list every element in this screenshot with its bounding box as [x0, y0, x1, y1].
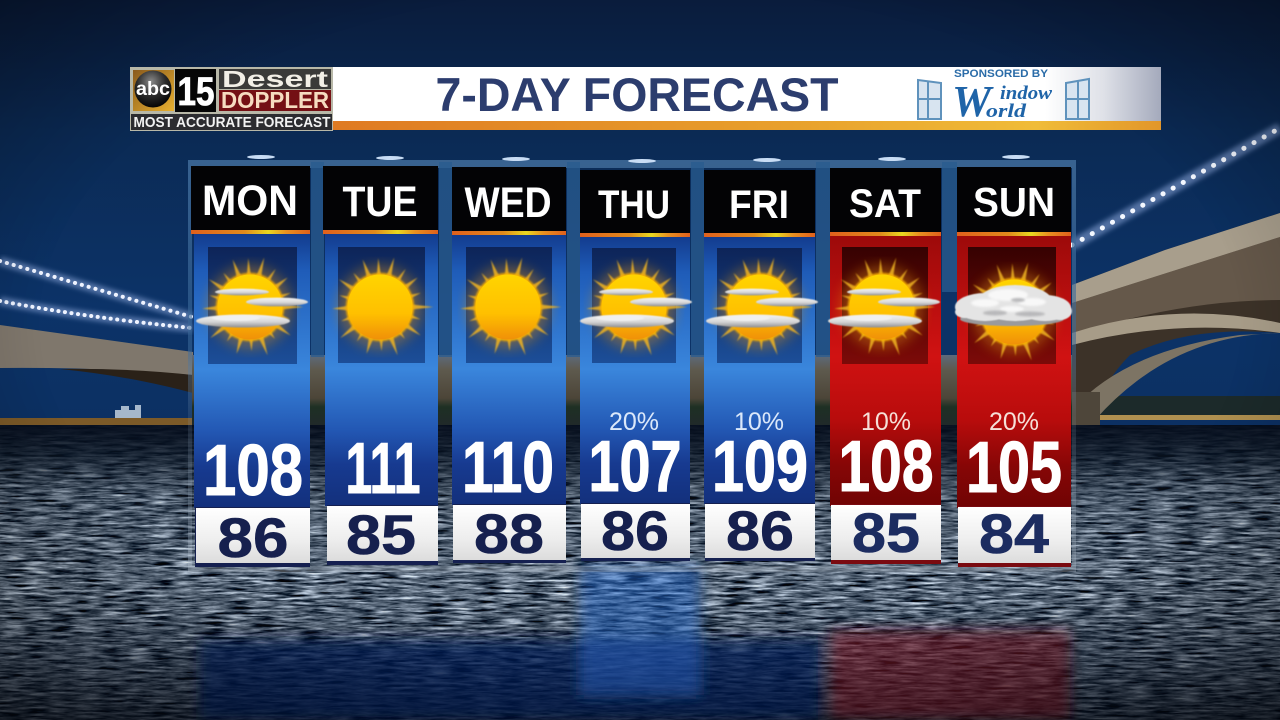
logo: abc15 Desert Doppler: abc [136, 79, 170, 100]
background: left bridge and lights [0, 261, 193, 425]
sponsor: SPONSORED BY [954, 68, 1049, 80]
icon: mostly sunny [580, 257, 692, 357]
panel: Wednesday [452, 167, 566, 565]
high temperature: 108 [838, 427, 934, 507]
panel: Tuesday [323, 166, 438, 566]
day label: TUE [342, 178, 418, 226]
panel: Monday [191, 166, 310, 569]
panel: Saturday [828, 168, 941, 564]
day label: FRI [729, 183, 789, 227]
sponsor: W [952, 77, 994, 126]
chance of rain: 10% [861, 408, 911, 436]
high temperature: 109 [712, 427, 808, 507]
low temperature: 85 [346, 503, 416, 566]
icon: sunny [460, 257, 561, 357]
Doppler: DOPPLER [221, 87, 329, 113]
day label: SUN [973, 179, 1055, 225]
high temperature: 107 [588, 427, 682, 507]
panel: Friday [704, 170, 818, 562]
icon: mostly sunny [196, 257, 308, 357]
sponsor [918, 68, 1089, 126]
icon: mostly sunny [706, 257, 818, 357]
chance of rain: 20% [609, 408, 659, 436]
background: night sky [0, 0, 1280, 440]
icon: mostly sunny [828, 257, 940, 357]
day label: SAT [849, 182, 921, 226]
panel: Thursday [580, 170, 692, 562]
glass frame behind the panels [188, 155, 1076, 572]
low temperature: 86 [218, 506, 288, 569]
high temperature: 111 [346, 429, 420, 509]
day label: THU [598, 183, 670, 227]
title: 7-DAY FORECAST [436, 68, 839, 121]
day label: MON [202, 177, 298, 225]
icon: window right [1066, 79, 1089, 119]
low temperature: 86 [601, 499, 669, 562]
panel: Sunday [955, 167, 1072, 567]
header bar [333, 67, 1161, 130]
sponsor: indow [1000, 83, 1052, 104]
low temperature: 88 [474, 502, 544, 565]
icon: mostly cloudy [955, 262, 1072, 362]
background: right bridge and lights [1072, 128, 1280, 445]
tagline: MOST ACCURATE FORECAST [134, 114, 330, 131]
icon: sunny [332, 257, 433, 357]
channel number: 15 [178, 70, 214, 114]
Desert: Desert [222, 66, 328, 92]
logo: abc15 Desert Doppler [130, 66, 333, 131]
abc ball [134, 70, 172, 108]
background: scene strip visible between panels [192, 355, 1072, 427]
day label: WED [464, 179, 552, 227]
low temperature: 85 [852, 501, 920, 564]
chance of rain: 10% [734, 408, 784, 436]
high temperature: 108 [203, 431, 303, 511]
low temperature: 86 [726, 499, 794, 562]
icon: window left [918, 80, 941, 119]
sponsor: orld [986, 101, 1027, 122]
background: water with panel reflections [0, 425, 1280, 720]
high temperature: 110 [462, 428, 554, 508]
low temperature: 84 [979, 502, 1049, 565]
high temperature: 105 [966, 428, 1062, 508]
chance of rain: 20% [989, 408, 1039, 436]
